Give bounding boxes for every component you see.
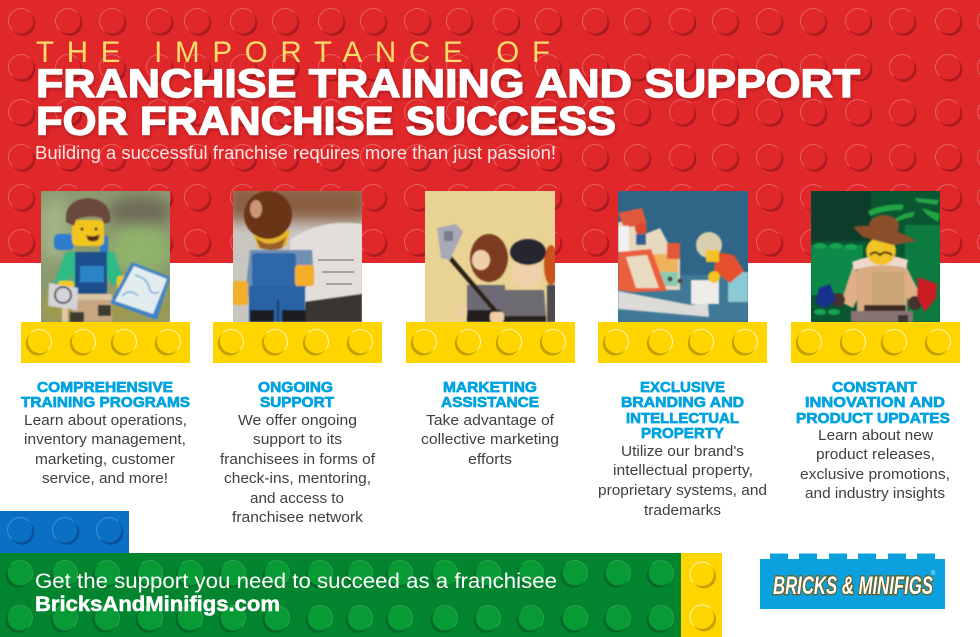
description: exclusive promotions, [800,466,950,483]
description: Take advantage of [426,412,555,429]
heading: COMPREHENSIVE [37,379,173,396]
photo: explorer minifigure with gems in jungle [811,191,940,322]
heading: CONSTANT [832,379,917,396]
photo: bearded minifigure in overalls with book [233,191,362,322]
heading: INTELLECTUAL [626,410,739,427]
yellow brick base [21,322,190,363]
subtitle: Building a successful franchise requires more than just passion! [35,143,556,163]
main title [36,62,860,144]
description: franchisee network [232,509,364,526]
blue brick accent [0,511,129,553]
column 4: exclusive branding and intellectual property [598,191,767,519]
heading: SUPPORT [260,394,334,411]
column 2: ongoing support [213,183,382,526]
eyebrow heading: THE IMPORTANCE OF [36,36,550,69]
description: proprietary systems, and [598,482,767,499]
title block [35,36,860,163]
heading: INNOVATION AND [805,394,945,411]
yellow brick base [598,322,767,363]
description: and access to [250,490,344,507]
description: Learn about operations, [24,412,187,429]
heading [258,379,334,411]
description: marketing, customer [35,451,175,468]
heading: ASSISTANCE [441,394,539,411]
column 5: constant innovation and product updates [791,191,960,502]
panel: red brick header background [0,0,980,263]
heading: PRODUCT UPDATES [796,410,950,427]
description: Learn about new [818,427,933,444]
description: trademarks [644,502,721,519]
description: service, and more! [42,470,168,487]
column 3: marketing assistance [406,191,575,468]
description: check-ins, mentoring, [224,470,371,487]
call to action text: Get the support you need to succeed as a franchisee [35,570,557,593]
yellow brick base [791,322,960,363]
description [24,412,187,487]
logo: Bricks & Minifigs [760,554,945,609]
heading: TRAINING PROGRAMS [21,394,190,411]
heading: MARKETING [443,379,537,396]
yellow brick base [406,322,575,363]
description: product releases, [816,446,935,463]
call to action banner [0,553,722,637]
logo: Bricks & Minifigs: ® [931,570,936,577]
description [800,427,950,502]
description [421,412,559,468]
heading: BRANDING AND [621,394,744,411]
heading [441,379,539,411]
description [598,443,767,519]
description: franchisees in forms of [220,451,376,468]
photo: minifigure building with bricks on denim [618,191,748,322]
main title: FRANCHISE TRAINING AND SUPPORT [36,62,860,106]
description: We offer ongoing [238,412,357,429]
website link: BricksAndMinifigs.com [35,593,280,616]
yellow brick end [681,553,722,637]
description [220,412,376,526]
description: efforts [468,451,512,468]
heading: EXCLUSIVE [640,379,725,396]
description: intellectual property, [613,462,753,479]
description: inventory management, [24,431,186,448]
heading [621,379,744,442]
yellow brick base [213,322,382,363]
photo: minifigures taking a selfie [425,191,558,322]
heading: PROPERTY [641,425,724,442]
description: Utilize our brand's [621,443,744,460]
heading [21,379,190,411]
heading: ONGOING [258,379,333,396]
main title: FOR FRANCHISE SUCCESS [36,100,616,144]
description: support to its [253,431,342,448]
photo: hiker minifigure with map [39,191,172,322]
description: and industry insights [805,485,945,502]
column 1: comprehensive training programs [21,191,190,487]
heading [796,379,950,427]
description: collective marketing [421,431,559,448]
